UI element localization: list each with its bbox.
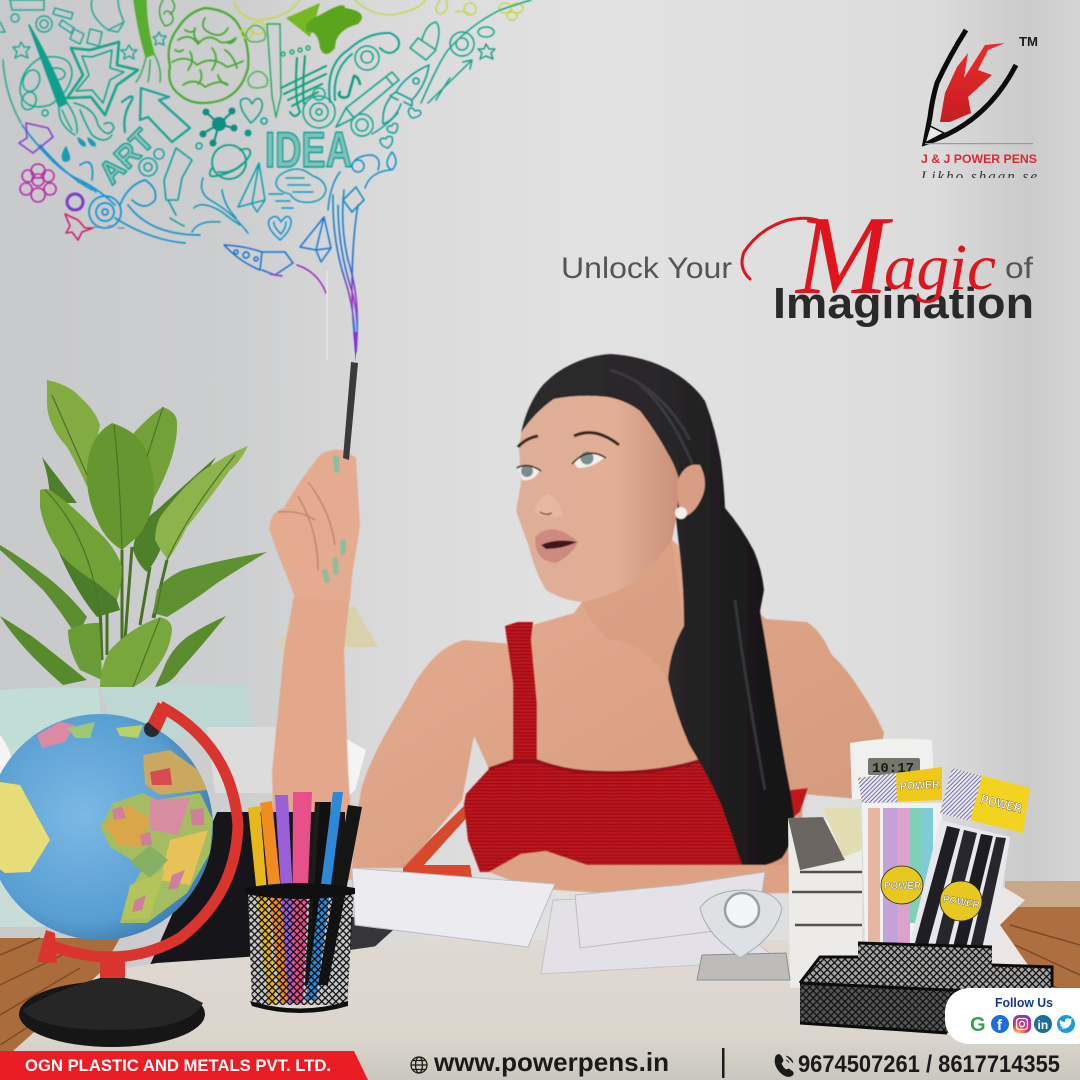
doodle: paper plane	[238, 163, 265, 212]
doodle: planet	[210, 145, 250, 179]
logo: nib	[925, 126, 944, 143]
desk clock: 10:17	[872, 761, 914, 777]
hair	[521, 354, 795, 866]
leaf: behind dark right	[133, 457, 216, 572]
doodle: note	[339, 76, 360, 98]
nostril	[540, 512, 552, 514]
floor: left	[0, 938, 120, 1052]
leaf: small behind left	[42, 457, 77, 503]
heading: magic: agic	[884, 231, 996, 304]
torso and arms	[352, 540, 884, 872]
heading: of: of	[1005, 252, 1034, 285]
doodle: dot	[244, 130, 252, 136]
doodle: dashes	[269, 194, 293, 208]
eyebrows	[518, 433, 619, 447]
doodle: swirls right of idea	[328, 152, 396, 210]
doodle burst	[0, 0, 531, 293]
dress frill	[489, 761, 699, 773]
doodle: inner star	[76, 50, 124, 103]
doodle: swirl	[329, 33, 399, 102]
doodle: plane lower	[300, 217, 331, 262]
heading: unlock your: Unlock Your	[561, 252, 732, 285]
logo icon: pencil outline	[925, 30, 1016, 143]
label: Follow Us	[995, 995, 1053, 1010]
doodle: art lettering: ART	[91, 121, 161, 191]
doodle: splash	[192, 178, 248, 233]
plant	[0, 380, 267, 687]
doodle: idea lettering: IDEA	[265, 122, 352, 178]
sticky note	[823, 808, 862, 857]
nose	[534, 494, 563, 518]
logo	[920, 30, 1038, 185]
icon: linkedin: in	[1038, 1018, 1048, 1032]
woman: raised arm	[269, 450, 360, 880]
footer: website: www.powerpens.in	[433, 1047, 669, 1077]
right books	[990, 880, 1028, 965]
plant stems	[100, 547, 167, 660]
paper sheet back	[541, 895, 775, 974]
sofa	[0, 684, 250, 927]
doodle: rocket lower	[224, 245, 293, 275]
hand	[269, 450, 360, 601]
follow us panel	[945, 988, 1080, 1044]
icon: phone	[775, 1054, 793, 1076]
icon: linkedin	[1034, 1015, 1052, 1033]
logo: brand name: J & J POWER PENS	[921, 152, 1037, 166]
heading: magic flourish	[742, 218, 826, 279]
doodle: rocket trail	[270, 265, 326, 293]
leaf: upper left	[47, 380, 100, 487]
pen holder	[245, 883, 355, 1013]
sticker	[940, 881, 982, 921]
doodle: droplets	[62, 138, 95, 161]
faint vertical line on wall	[326, 270, 328, 360]
tray front	[800, 983, 992, 1033]
globe base top	[22, 978, 203, 1030]
leaf: small lower middle	[68, 623, 102, 680]
leaf: upper right	[132, 407, 177, 500]
leaf midribs	[45, 395, 235, 687]
desk	[12, 940, 1080, 1080]
hair sheen	[610, 370, 765, 790]
logo: underline	[925, 143, 1033, 144]
doodle: heart lower	[268, 216, 291, 240]
globe continents	[0, 722, 213, 923]
forearm on desk	[489, 851, 791, 896]
globe hub	[144, 721, 160, 737]
doodle: swirl below star	[74, 103, 114, 140]
logo: tagline: Likho shaan se	[920, 169, 1037, 185]
doodle: small hearts	[372, 108, 421, 148]
heading: magic: M	[794, 194, 894, 318]
product pack: pastel pens	[858, 767, 942, 945]
doodle: spirals	[303, 46, 379, 136]
doodle: molecule	[200, 108, 236, 146]
africa	[100, 793, 213, 923]
leaf: centre big	[87, 423, 154, 550]
doodle: star	[67, 42, 138, 115]
black pens	[915, 826, 1006, 949]
papers	[352, 868, 775, 974]
doodle: bristles top	[136, 54, 160, 82]
leaf: left	[40, 489, 122, 600]
pack header	[940, 768, 1030, 833]
notebook	[352, 868, 555, 947]
globe top cap	[148, 702, 170, 732]
nails	[325, 458, 343, 580]
doodle: middle pen	[267, 24, 281, 117]
icon: globe	[411, 1057, 427, 1073]
ink tip above pen	[354, 332, 358, 362]
right dress edge	[790, 788, 808, 820]
doodle: lock	[410, 22, 439, 60]
logo icon: flame	[940, 43, 1005, 122]
doodle: right swirls	[421, 0, 531, 103]
icon: facebook: f	[997, 1017, 1003, 1034]
finger creases	[278, 482, 335, 570]
heading: imagination: Imagination	[773, 279, 1034, 328]
leaf: behind lower left	[50, 510, 120, 617]
doodle: small circles	[139, 143, 202, 176]
globe base	[19, 981, 205, 1047]
doodle: heart	[240, 98, 267, 124]
leaf: bottom centre	[100, 617, 172, 687]
doodle: purple flower and stars	[19, 123, 124, 240]
mesh tray	[800, 943, 1052, 1033]
eyelids	[517, 453, 606, 471]
globe post	[100, 958, 125, 982]
doodle: tube	[164, 148, 192, 226]
leaf: lower left	[0, 616, 87, 685]
book stack	[788, 808, 1028, 988]
sticker	[881, 866, 923, 904]
doodle: swirls lower left	[22, 125, 200, 243]
leaf: far right	[153, 552, 267, 617]
globe sphere	[0, 714, 213, 940]
paper sheet front	[575, 872, 765, 948]
footer: company banner	[0, 1051, 368, 1080]
leaf: lower right	[155, 616, 226, 687]
pack header	[858, 767, 942, 803]
doodle: cloud	[276, 169, 326, 202]
white cushion and printer lid	[207, 727, 366, 800]
globe	[0, 702, 238, 1047]
icon: google: G	[970, 1014, 986, 1036]
doodle: big pencil	[336, 72, 399, 127]
face	[516, 396, 680, 602]
desk clock	[850, 739, 934, 800]
neck shading	[582, 540, 684, 679]
doodle: palette	[20, 57, 72, 116]
icon: facebook	[991, 1015, 1009, 1034]
doodle: rocket	[383, 65, 429, 124]
orange chair	[403, 806, 472, 877]
greenland and arctic	[37, 722, 75, 748]
doodle: music staff	[281, 56, 326, 116]
pen held in hand	[343, 362, 358, 460]
globe arc	[50, 706, 238, 957]
doodle: arrow	[122, 88, 190, 142]
product pack: pastel pens: POWER	[900, 779, 940, 793]
doodle: lime splat	[306, 5, 362, 54]
doodle: brain	[169, 8, 248, 103]
logo: trademark: TM	[1019, 34, 1038, 49]
lamp shade behind arm	[276, 606, 378, 647]
doodle: top sketches	[234, 0, 523, 38]
doodle: lime arrow	[286, 3, 320, 37]
glass clock	[697, 890, 790, 980]
pen holder inner	[248, 890, 352, 1005]
europe	[143, 750, 207, 795]
icon: instagram	[1013, 1015, 1031, 1033]
leaf: right long	[155, 446, 248, 560]
floor and skirting: right	[985, 881, 1080, 1045]
eye whites	[518, 466, 540, 480]
sticker: POWER	[942, 894, 981, 911]
doodle: clouds	[246, 25, 268, 88]
globe stand collar	[37, 930, 57, 963]
doodle: dots row	[281, 46, 310, 56]
doodle: tall brush	[134, 0, 154, 57]
laptop	[150, 812, 402, 965]
product pack: black pens	[910, 768, 1030, 950]
irises	[521, 465, 533, 477]
footer: company banner: OGN PLASTIC AND METALS PVT. LTD.	[25, 1056, 331, 1075]
footer: phone: 9674507261 / 8617714355	[798, 1051, 1060, 1078]
doodle: spiral top	[159, 0, 175, 26]
ear	[678, 465, 705, 517]
sticker: POWER	[884, 881, 922, 892]
tray rims	[800, 943, 1052, 1033]
red dress	[464, 622, 808, 872]
doodle: bristles	[59, 103, 77, 135]
pens in holder	[248, 792, 362, 1003]
doodle: brush body	[29, 25, 67, 107]
doodle: rising ink tail from pen	[333, 187, 364, 352]
lips	[535, 529, 578, 563]
doodle: top-left outlines	[0, 0, 166, 123]
book edges	[792, 872, 862, 925]
woman: body	[352, 354, 884, 896]
mouth	[541, 541, 577, 549]
icon: twitter	[1057, 1015, 1075, 1033]
leaf: far left	[0, 545, 87, 637]
product pack: black pens: POWER	[979, 791, 1024, 816]
footer: divider	[722, 1048, 724, 1078]
south america	[0, 780, 50, 873]
top book cover	[788, 817, 845, 870]
earring	[675, 507, 687, 519]
pastel pens	[868, 808, 933, 943]
